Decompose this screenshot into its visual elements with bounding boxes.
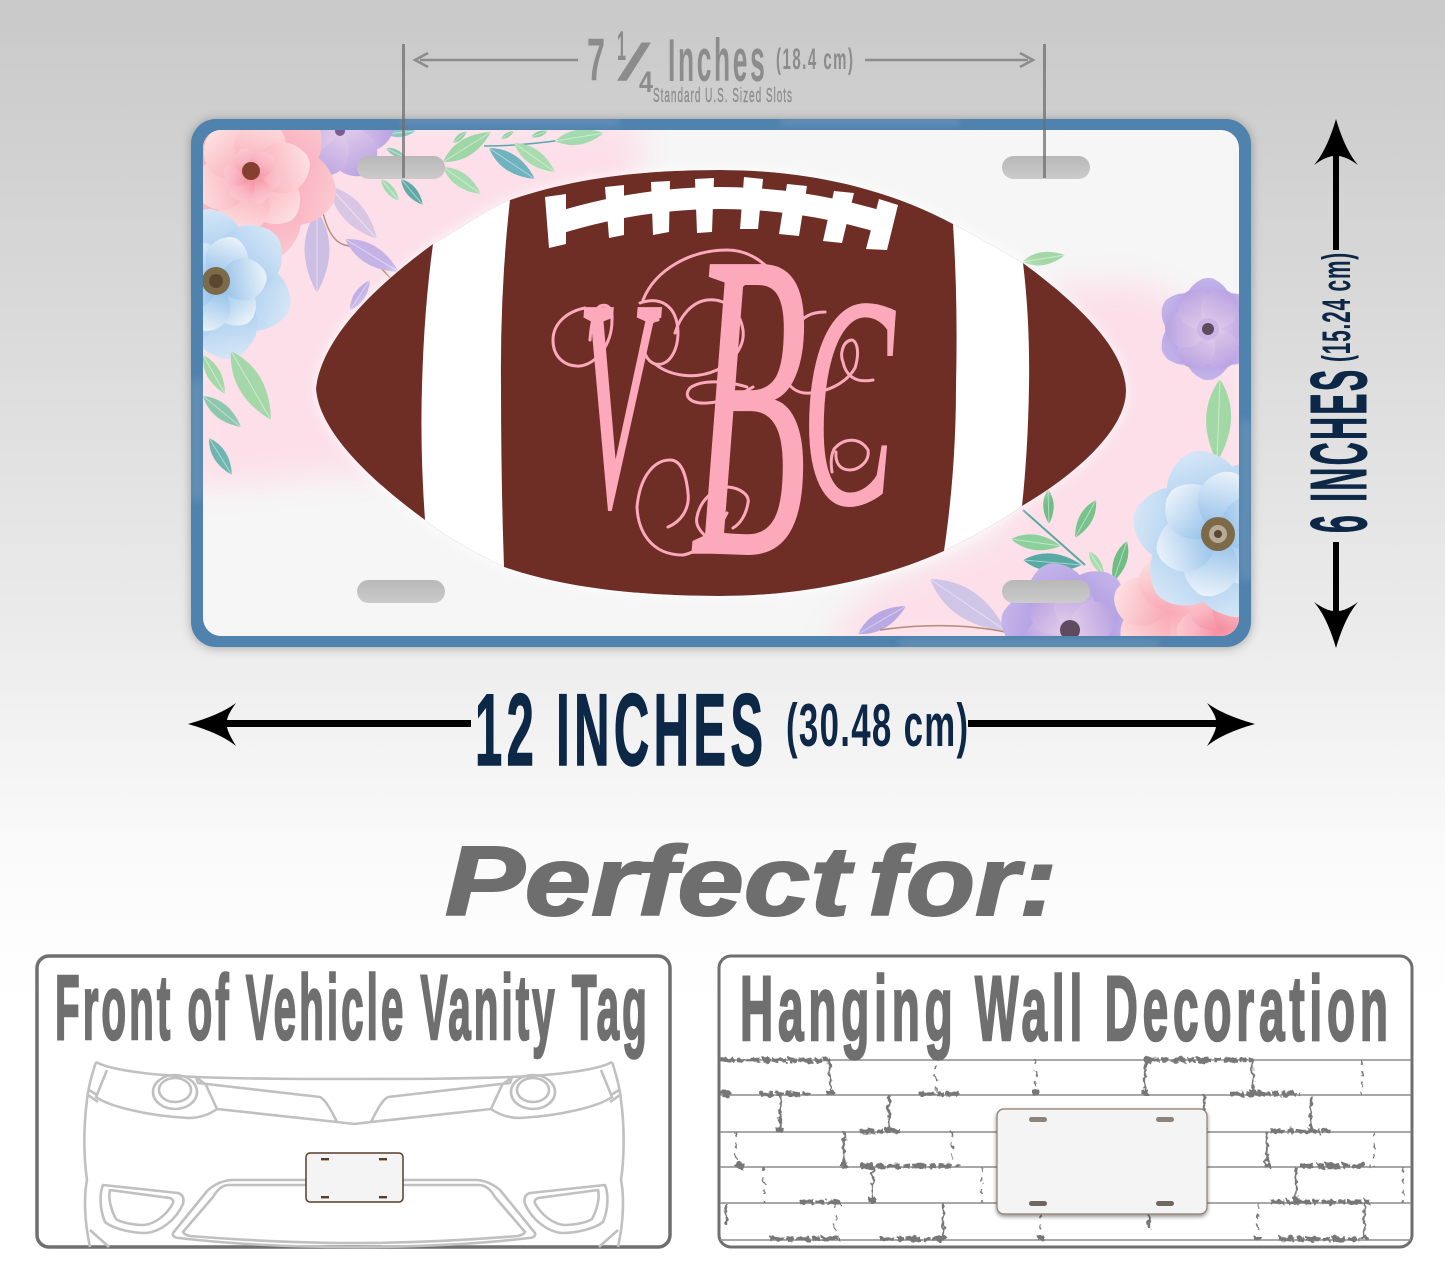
monogram VBC xyxy=(553,162,897,649)
green sprig bottom right xyxy=(1011,490,1128,578)
panel title: Hanging Wall Decoration xyxy=(740,958,1388,1060)
brick wall xyxy=(720,1060,1411,1240)
monogram VBC: V xyxy=(578,238,663,570)
slot spacing label: (18.4 cm) xyxy=(776,44,853,77)
width label: 12 INCHES xyxy=(475,673,763,787)
standard slots note: Standard U.S. Sized Slots xyxy=(653,86,792,107)
width metric label: (30.48 cm) xyxy=(786,693,968,759)
purple flower right xyxy=(1162,278,1239,380)
blue flower left xyxy=(203,209,290,359)
heading: perfect for: for: xyxy=(868,826,1057,936)
football xyxy=(316,170,1126,596)
hanging blank plate xyxy=(997,1109,1207,1214)
bottom arrow xyxy=(1314,542,1358,648)
left dimension arrow xyxy=(415,53,578,67)
heading: perfect for xyxy=(445,826,1057,936)
purple flower top xyxy=(318,130,393,176)
green leaves left xyxy=(203,351,271,475)
laces xyxy=(545,177,898,250)
plate blue border xyxy=(191,119,1251,647)
license plate: C xyxy=(802,236,897,568)
lavender leaves left xyxy=(304,188,398,310)
border mottling xyxy=(190,116,1252,650)
lavender leaves bottom xyxy=(858,579,1004,634)
slot spacing label: Inches xyxy=(668,27,765,94)
left arrow xyxy=(188,703,471,746)
floral artwork xyxy=(203,130,1239,636)
slot spacing label: 4 xyxy=(639,66,653,99)
panel frame xyxy=(37,956,670,1247)
slot spacing label: / xyxy=(617,34,652,92)
height dimension: 6 inches xyxy=(1294,119,1383,648)
slot spacing label xyxy=(587,22,853,99)
right dimension arrow xyxy=(865,53,1033,67)
purple flower bottom xyxy=(1001,563,1124,636)
leaf right top xyxy=(1022,252,1065,266)
panel: hanging wall decoration xyxy=(719,956,1412,1247)
panel frame xyxy=(719,956,1412,1247)
left white stripe xyxy=(421,200,510,567)
pink watercolor wash top left xyxy=(190,120,640,490)
leaf sprigs top left xyxy=(381,130,604,205)
green leaf right xyxy=(1206,379,1232,457)
top arrow xyxy=(1314,119,1358,250)
heading: perfect for: Perfect xyxy=(445,826,854,936)
plate white face xyxy=(203,130,1239,636)
blue flower right xyxy=(1134,450,1239,618)
mortar joints faded xyxy=(736,1060,1403,1240)
right slot guide line xyxy=(1043,44,1046,178)
monogram flourishes xyxy=(553,250,873,555)
top dimension: slot spacing xyxy=(402,22,1046,178)
height metric label: (15.24 cm) xyxy=(1314,253,1359,362)
pink flower bottom right xyxy=(1114,560,1239,636)
right white stripe xyxy=(944,224,1029,551)
width dimension: 12 inches xyxy=(188,673,1255,787)
panel: front of vehicle vanity tag xyxy=(37,956,670,1247)
mounting slots xyxy=(357,156,1090,603)
mortar joints solid xyxy=(726,1060,1364,1240)
right arrow xyxy=(968,703,1255,746)
straight mortar rows xyxy=(720,1060,1411,1240)
car front outline xyxy=(84,1062,624,1247)
monogram VBC: B xyxy=(690,162,808,649)
slot spacing label: 1 xyxy=(617,22,626,69)
mini plate on car xyxy=(306,1153,403,1202)
height label: 6 INCHES xyxy=(1294,370,1383,533)
license plate xyxy=(186,114,1256,654)
football brown body xyxy=(316,170,1126,596)
left slot guide line xyxy=(402,44,405,178)
pink watercolor wash bottom right xyxy=(820,280,1250,650)
panel title: Front of Vehicle Vanity Tag xyxy=(55,957,647,1060)
slot spacing label: 7 xyxy=(587,26,605,93)
pink flower top left xyxy=(203,130,336,256)
mortar grunge ticks xyxy=(722,1090,1364,1240)
